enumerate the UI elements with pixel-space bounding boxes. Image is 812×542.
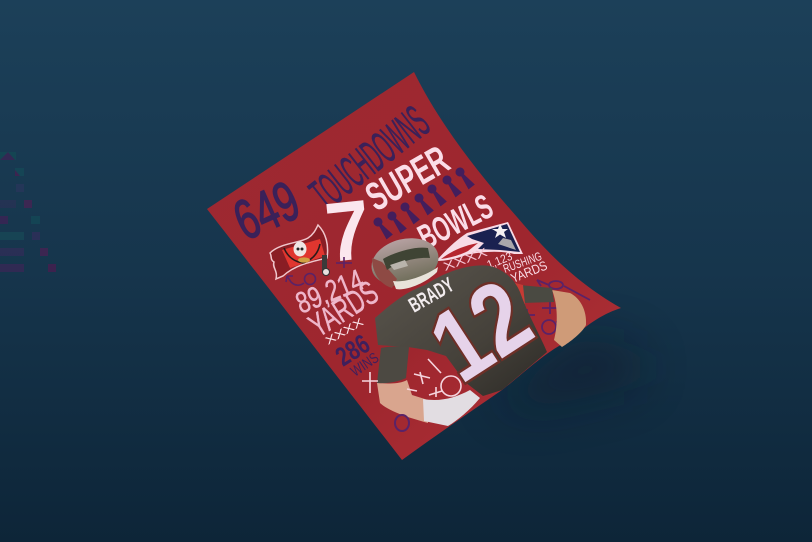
x marks under patriots logo: XXXX [441,245,489,274]
poster drop shadow [490,335,640,410]
player: right arm [511,282,586,347]
stat: 1,123 rushing yards: 1,123 [485,249,514,272]
play diagram: purple marks left [286,257,352,285]
stat: 1,123 rushing yards: YARDS [509,258,550,286]
bowls: BOWLS [412,187,499,257]
speckle noise at left edge [0,152,56,272]
poster sheet [207,72,621,460]
icon: buccaneers flag logo [270,225,330,279]
number 7: 7 [321,182,375,280]
super: SUPER [358,138,457,220]
seven trophies [372,166,475,240]
play diagram: white marks centre [362,359,461,397]
stat: 89,214 yards: 89,214 [291,264,369,320]
stat: 89,214 yards: YARDS [302,273,384,344]
player: name BRADY: BRADY [405,273,458,317]
stat: 89,214 yards [291,264,384,344]
stat: 286 wins: 286 [330,329,375,372]
play diagram: purple circle bottom [395,415,409,431]
stat: 286 wins: WINS [348,349,382,380]
stat: 1,123 rushing yards [485,249,550,286]
player: helmet [366,231,444,293]
player: left sleeve [377,346,409,383]
icon: patriots logo [436,222,523,261]
headline: 649 touchdowns [224,96,439,252]
headline: 649 touchdowns: 649 [224,168,308,252]
stat: 1,123 rushing yards: RUSHING [501,249,544,276]
player: wrist tape [423,390,480,426]
player: jersey [375,265,547,396]
player: left arm [377,380,428,423]
play diagram: purple marks right [519,280,590,334]
player: number 12: 12 [411,258,550,403]
x marks under yards: XXXX [324,316,367,348]
